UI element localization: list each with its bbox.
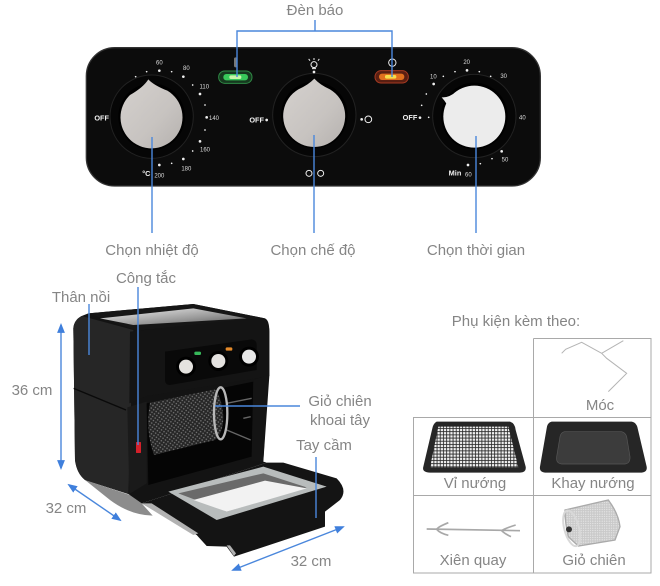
callout lines: indicator lights [237, 20, 392, 77]
temperature dial: 80 [183, 66, 190, 72]
heading: accessories: Phụ kiện kèm theo: [452, 313, 580, 330]
time dial: 60 [465, 173, 472, 179]
fryer front upper [129, 318, 269, 403]
label: hook: Móc [586, 397, 615, 414]
label: fry basket: Giỏ chiên [308, 393, 372, 410]
red switch [136, 442, 141, 453]
temperature dial: 110 [200, 84, 210, 90]
label: body: Thân nồi [52, 289, 110, 306]
label: fry basket accessory: Giỏ chiên [562, 552, 626, 569]
accessories grid [414, 338, 651, 573]
label: handle: Tay cầm [296, 437, 352, 454]
dimension: depth: 32 cm [46, 500, 86, 517]
callout line: time [475, 136, 477, 233]
temperature dial: 60 [156, 60, 163, 66]
temperature dial: 160 [200, 147, 211, 153]
temperature dial: OFF [94, 114, 110, 123]
mode dial: OFF [249, 115, 265, 124]
dimension: width: 32 cm [291, 553, 331, 570]
time dial: Min [449, 168, 462, 177]
mode dial [249, 58, 372, 176]
time dial: 20 [463, 60, 471, 66]
fryer base silhouette [73, 304, 269, 503]
temperature dial: 180 [181, 167, 192, 173]
temperature dial [94, 60, 220, 179]
control panel [86, 48, 540, 186]
callout line: handle [315, 457, 317, 518]
callout line: mode [313, 135, 315, 233]
temperature dial: 140 [209, 116, 220, 122]
open door [142, 463, 343, 557]
callout line: power switch [137, 287, 139, 445]
label: mode: Chọn chế độ [270, 242, 356, 259]
label: power switch: Công tắc [116, 270, 177, 287]
time dial: 50 [502, 157, 509, 163]
dimension: depth [46, 485, 120, 520]
accessory: baking tray [540, 422, 647, 473]
time dial: 40 [519, 116, 526, 122]
heading: indicator lights label: Đèn báo [287, 2, 343, 19]
indicator: green light [219, 57, 252, 83]
fryer top [88, 304, 265, 331]
fryer side [73, 316, 133, 494]
label: grill rack: Vỉ nướng [444, 475, 506, 492]
fryer front column [127, 402, 147, 494]
dimension: width [233, 527, 343, 570]
callout line: temperature [151, 137, 153, 233]
temperature dial: °C [142, 169, 151, 178]
oven interior [147, 382, 253, 485]
time dial: OFF [403, 113, 418, 122]
time dial: 10 [430, 74, 437, 80]
label: time: Chọn thời gian [427, 242, 525, 259]
air fryer product image [73, 304, 343, 557]
time dial: 30 [500, 74, 508, 80]
shadow under fryer [85, 480, 153, 516]
accessory: hook [562, 341, 627, 392]
label: rotisserie skewer: Xiên quay [440, 552, 507, 569]
label: baking tray: Khay nướng [551, 475, 635, 492]
callout line: fry basket [215, 405, 300, 407]
accessory: grill rack [423, 422, 526, 473]
label: temperature: Chọn nhiệt độ [105, 242, 199, 259]
time dial [403, 60, 526, 179]
accessory: fry basket [560, 500, 620, 548]
indicator: orange light [375, 59, 408, 83]
callout line: body [88, 304, 90, 355]
dimension: height: 36 cm [12, 382, 52, 399]
label: fry basket second line: khoai tây [310, 412, 371, 429]
accessory: rotisserie skewer [427, 523, 520, 537]
fry basket [148, 387, 227, 455]
temperature dial: 200 [154, 173, 165, 179]
oven right column [227, 375, 268, 461]
